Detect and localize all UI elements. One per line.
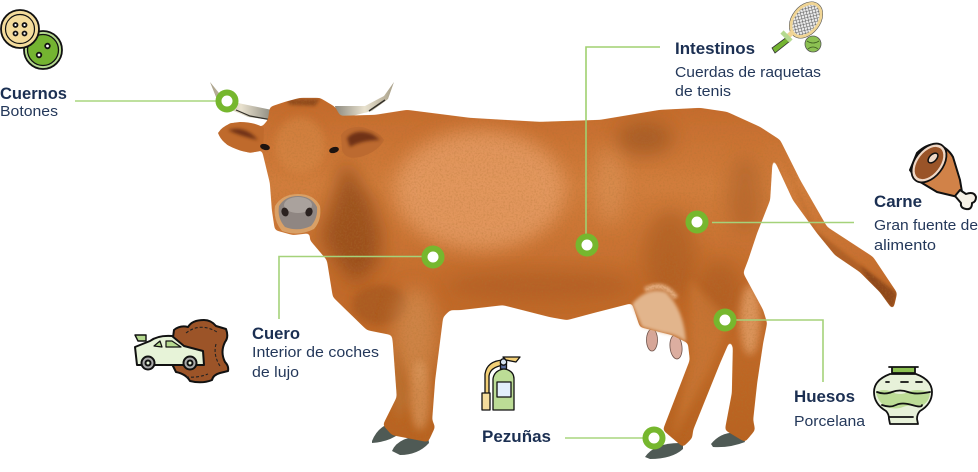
label: Carne: Carne [874, 193, 922, 211]
label: Cuernos: Cuernos [0, 85, 67, 103]
marker: Pezuñas [646, 430, 662, 446]
icon: buttons [1, 10, 62, 69]
label: Intestinos: de tenis [675, 83, 731, 100]
marker: Cuernos [218, 92, 236, 110]
label: Cuero: Cuero [252, 325, 300, 343]
label: Huesos: Porcelana [794, 413, 866, 430]
label: Cuero [252, 325, 379, 381]
cow udder teats [646, 329, 683, 360]
icon: fire extinguisher [482, 357, 520, 410]
label: Cuero: Interior de coches [252, 344, 379, 361]
cow muzzle [275, 194, 320, 234]
label: Huesos [794, 388, 866, 430]
cow horns [210, 82, 394, 120]
icon: tennis racket and ball [772, 0, 829, 53]
label: Huesos: Huesos [794, 388, 855, 406]
icon: ham [904, 137, 976, 209]
label: Pezuñas: Pezuñas [482, 428, 551, 446]
marker: Cuero [424, 248, 442, 266]
cow udder [632, 290, 686, 342]
cow body [205, 90, 905, 450]
connector: Carne [712, 222, 854, 224]
cow eyes [259, 143, 340, 154]
icon: vase [874, 367, 932, 424]
label: Intestinos [675, 40, 821, 100]
connector: Huesos [735, 320, 823, 382]
marker: Huesos [716, 312, 734, 328]
connector: Pezuñas [565, 437, 645, 439]
marker: Carne [688, 214, 706, 230]
cow shading [250, 98, 897, 445]
label: Carne: alimento [874, 237, 936, 254]
illustration: cow [205, 82, 905, 459]
connector: Cuernos [75, 100, 220, 102]
label: Cuernos [0, 85, 67, 120]
label: Cuernos: Botones [0, 103, 58, 120]
label: Cuero: de lujo [252, 364, 299, 381]
cow ears [218, 122, 384, 158]
connector: Cuero [279, 256, 428, 319]
label: Carne [874, 193, 978, 254]
icon: leather and car [135, 320, 228, 382]
label: Carne: Gran fuente de [874, 217, 978, 234]
label: Intestinos: Intestinos [675, 40, 755, 58]
label: Intestinos: Cuerdas de raquetas [675, 64, 821, 81]
cow hooves [372, 423, 745, 459]
marker: Intestinos [578, 236, 596, 254]
connector: Intestinos [586, 47, 660, 238]
